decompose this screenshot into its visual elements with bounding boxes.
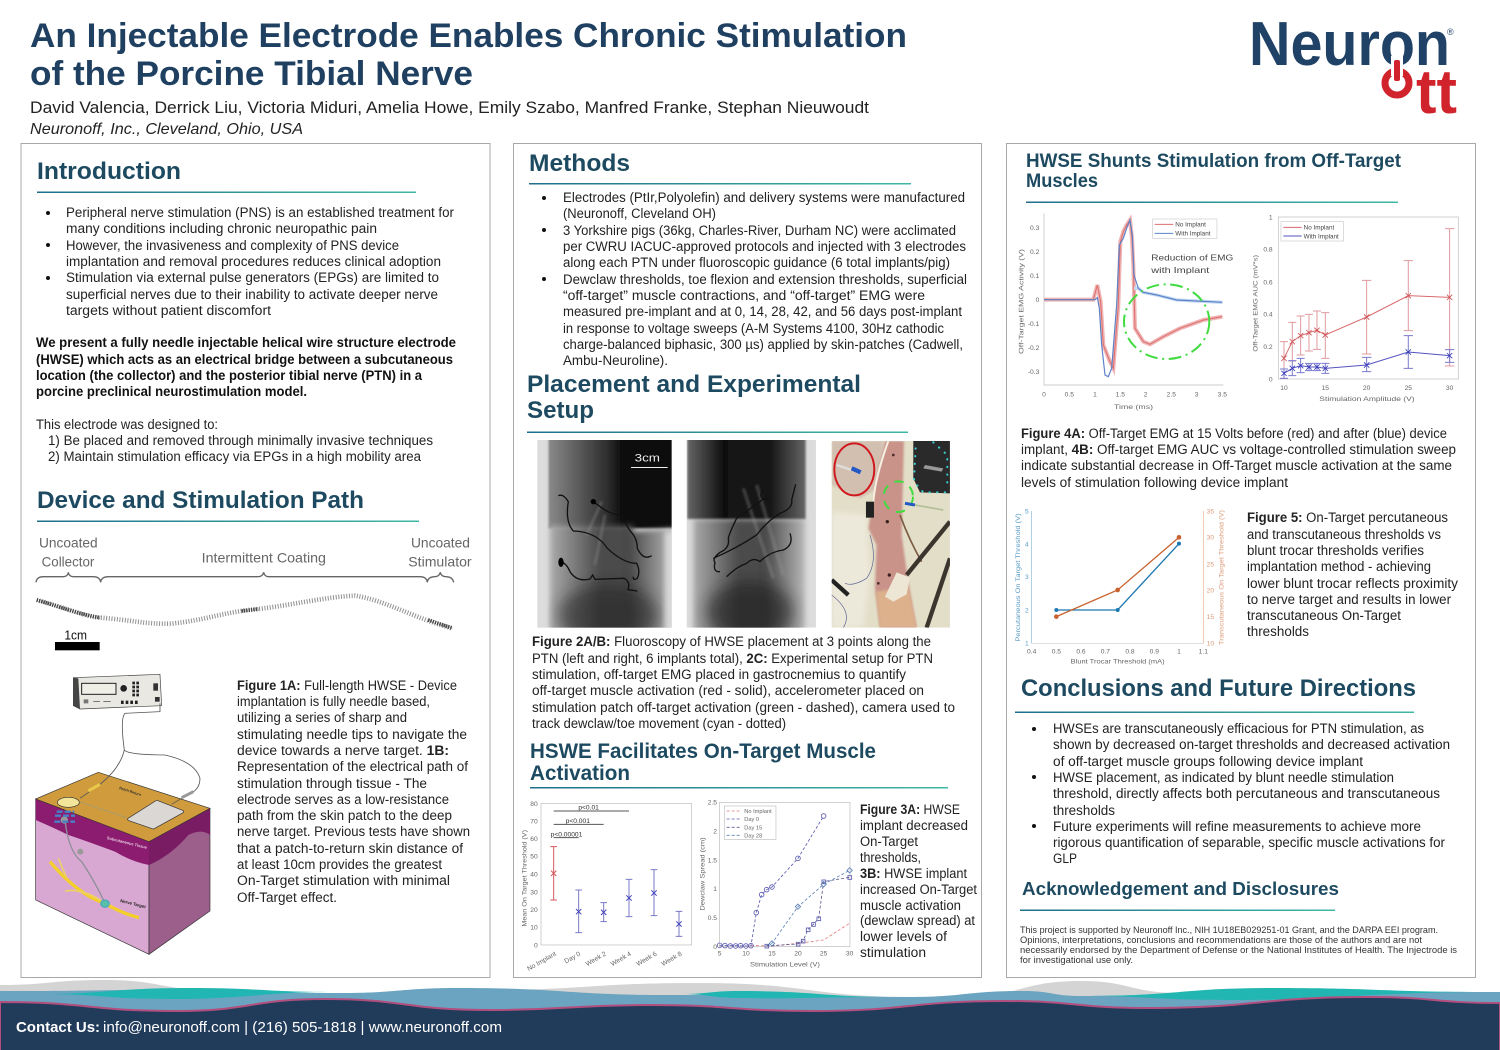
- chart 4A: off-target EMG traces: Off-Target EMG Activity (V): [1018, 249, 1025, 354]
- chart 4A: off-target EMG traces: 2.5: [1167, 392, 1176, 399]
- text: conclusions bullets: Future experiments will refine measurements to achieve more: [1053, 819, 1421, 834]
- text: conclusions bullets: shown by decreased on-target thresholds and decreased activation: [1053, 737, 1450, 752]
- chart 4A: off-target EMG traces: 0.2: [1030, 249, 1040, 256]
- chart 3A: mean on-target threshold: 10: [530, 925, 538, 932]
- title: An Injectable Electrode Enables Chronic Stimulation: [30, 17, 907, 55]
- figure 1A: electrode wire: Uncoated: [411, 535, 470, 551]
- logo: Neuronoff: [1249, 10, 1457, 127]
- chart 4A: off-target EMG traces: 1.5: [1116, 392, 1125, 399]
- chart 4B: off-target EMG AUC: Stimulation Amplitude (V): [1319, 396, 1415, 403]
- text: figure 1 caption: Figure 1A: Full-length HWSE - Device: [237, 678, 457, 693]
- chart 3A: mean on-target threshold: 60: [530, 836, 538, 843]
- logo: Neuronoff: tt: [1416, 58, 1457, 127]
- text: conclusions bullets: HWSE placement, as indicated by blunt needle stimulation: [1053, 770, 1394, 785]
- chart 3A: mean on-target threshold: p<0.01: [578, 805, 599, 812]
- chart 4A: off-target EMG traces: -0.2: [1028, 345, 1040, 352]
- chart 5: thresholds: Transcutaneous On Target Threshold (V): [1218, 510, 1225, 645]
- text: figure 1 caption: device towards a nerve target. 1B:: [237, 743, 449, 758]
- chart 5: thresholds: 1: [1177, 648, 1181, 655]
- chart 4A: off-target EMG traces: 3.5: [1218, 392, 1227, 399]
- electrode path: [54, 801, 127, 907]
- chart 3B: dewclaw spread: [699, 800, 854, 968]
- text: figure 2 caption: stimulation patch off-target activation (green - dashed), camera used to: [532, 700, 955, 715]
- chart 5: thresholds: 5: [1025, 508, 1029, 515]
- chart 3B: dewclaw spread: 20: [794, 950, 802, 957]
- chart 3A: mean on-target threshold: Week 8: [660, 951, 684, 968]
- chart 5: thresholds: 3: [1025, 574, 1029, 581]
- heading: HWSE Shunts Stimulation: [1026, 151, 1402, 203]
- text: conclusions bullets: [1032, 721, 1450, 866]
- chart 4A: off-target EMG traces: 0.3: [1030, 225, 1040, 232]
- text: figure 3 caption: stimulation: [860, 945, 926, 960]
- text: figure 2 caption: off-target muscle activation (red - solid), accelerometer placed on: [532, 683, 924, 698]
- text: introduction bullets: many conditions including chronic neuropathic pain: [66, 221, 377, 236]
- text: conclusions bullets: thresholds: [1053, 803, 1115, 818]
- chart 3B: dewclaw spread: 0: [713, 944, 717, 951]
- chart 4A: off-target EMG traces: 3: [1195, 392, 1199, 399]
- figure 1A: electrode wire: Uncoated: [39, 535, 98, 551]
- text: methods bullets: per CWRU IACUC-approved protocols and injected with 3 electrodes: [563, 239, 966, 254]
- chart 3B: dewclaw spread: 10: [742, 950, 750, 957]
- text: figure 1 caption: On-Target stimulation with minimal: [237, 873, 450, 888]
- text: design aims: 2) Maintain stimulation efficacy via EPGs in a high mobility area: [48, 449, 421, 464]
- chart 3B: dewclaw spread: Day 15: [744, 825, 762, 831]
- chart 4A: off-target EMG traces: With Implant: [1175, 231, 1211, 238]
- chart 3A: mean on-target threshold: 40: [530, 872, 538, 879]
- text: figure 2 caption: track dewclaw/toe movement (cyan - dotted): [532, 716, 786, 731]
- chart 4A: off-target EMG traces: 2: [1144, 392, 1148, 399]
- text: conclusions bullets: of off-target muscle groups following device implant: [1053, 754, 1363, 769]
- chart 5: thresholds: 0.6: [1076, 648, 1086, 655]
- chart 5: thresholds: 0.9: [1150, 648, 1159, 655]
- text: figure 5 caption: lower blunt trocar reflects proximity: [1247, 576, 1458, 591]
- chart 5: thresholds: 0.5: [1052, 648, 1061, 655]
- text: methods bullets: Electrodes (PtIr,Polyolefin) and delivery systems were manufactured: [563, 190, 965, 205]
- text: figure 3 caption: implant decreased: [860, 818, 968, 833]
- text: bold statement: (HWSE) which acts as an electrical bridge between a subcutaneous: [36, 352, 453, 367]
- text: disclosures: Opinions, interpretations, conclusions and recommendations are those of the authors and are not: [1020, 935, 1422, 946]
- text: methods bullets: “off-target” muscle contractions, and “off-target” EMG were: [563, 288, 925, 303]
- panel: middle: [514, 144, 982, 978]
- chart 3A: mean on-target threshold: p<0.001: [566, 818, 590, 825]
- chart 4A: off-target EMG traces: 0.5: [1065, 392, 1074, 399]
- text: figure 1 caption: [237, 678, 470, 905]
- text: disclosures: for investigational use only.: [1020, 955, 1133, 966]
- chart 4B: off-target EMG AUC: 10: [1280, 385, 1288, 392]
- heading: Placement and Experimental Setup: [527, 371, 908, 433]
- text: figure 1 caption: Representation of the electrical path of: [237, 759, 468, 774]
- text: introduction bullets: Peripheral nerve stimulation (PNS) is an established treatment for: [66, 205, 454, 220]
- text: bold statement: We present a fully needle injectable helical wire structure electrode: [36, 335, 456, 350]
- chart 3B: dewclaw spread: 0.5: [708, 915, 717, 922]
- heading: Placement and Experimental Setup: Placement and Experimental: [527, 371, 861, 398]
- text: methods bullets: (Neuronoff, Cleveland OH): [563, 206, 716, 221]
- chart 5: thresholds: 15: [1207, 614, 1214, 621]
- text: bold statement: [36, 335, 456, 399]
- text: methods bullets: Dewclaw thresholds, toe flexion and extension thresholds, superficial: [563, 272, 967, 287]
- figure 2B: fluoroscopy right: [686, 440, 816, 628]
- chart 4A: off-target EMG traces: No Implant: [1175, 221, 1206, 228]
- text: conclusions bullets: GLP: [1053, 851, 1077, 866]
- chart 4B: off-target EMG AUC: 1: [1269, 214, 1273, 221]
- text: introduction bullets: targets without patient discomfort: [66, 303, 271, 318]
- text: figure 1 caption: at least 10cm provides the greatest: [237, 857, 442, 872]
- box: tissue block: [36, 772, 210, 954]
- chart 3A: mean on-target threshold: No Implant: [526, 951, 558, 973]
- text: introduction bullets: superficial nerves due to their inability to activate deeper nerve: [66, 287, 438, 302]
- chart 3A: mean on-target threshold: 80: [530, 801, 538, 808]
- heading: HWSE Shunts Stimulation: HWSE Shunts Stimulation from Off-Target: [1026, 151, 1402, 172]
- logo: Neuronoff: Neuron: [1249, 10, 1450, 79]
- title: of the Porcine Tibial Nerve: [30, 55, 473, 93]
- text: methods bullets: along each PTN under fluoroscopic guidance (6 total implants/pig): [563, 255, 950, 270]
- panel: right: [1006, 144, 1476, 978]
- chart 3B: dewclaw spread: 25: [820, 950, 828, 957]
- text: figure 4 caption: indicate substantial decrease in Off-Target muscle activation at the same: [1021, 458, 1452, 473]
- heading: Placement and Experimental Setup: Setup: [527, 397, 594, 424]
- chart 5: thresholds: Blunt Trocar Threshold (mA): [1071, 659, 1165, 666]
- heading: Acknowledgement and Disclosures: Acknowledgement and Disclosures: [1022, 879, 1339, 899]
- text: methods bullets: [542, 190, 967, 368]
- text: design aims: 1) Be placed and removed through minimally invasive techniques: [48, 433, 433, 448]
- chart 4B: off-target EMG AUC: 20: [1363, 385, 1371, 392]
- figure 2A: fluoroscopy left: [537, 440, 672, 628]
- text: methods bullets: in response to voltage sweeps (A-M Systems 4100, 30Hz cathodic: [563, 321, 944, 336]
- footer: [0, 980, 1500, 1050]
- text: introduction bullets: [46, 205, 454, 318]
- chart 5: thresholds: 2: [1025, 607, 1029, 614]
- chart 4B: off-target EMG AUC: 30: [1446, 385, 1454, 392]
- text: figure 5 caption: and transcutaneous thresholds vs: [1247, 527, 1441, 542]
- chart 3A: mean on-target threshold: Mean On Target Threshold (V): [522, 830, 529, 927]
- chart 4A: off-target EMG traces: Time (ms): [1114, 404, 1153, 411]
- heading: Methods: Methods: [529, 150, 630, 177]
- chart 3A: mean on-target threshold: [522, 801, 692, 973]
- text: figure 1 caption: nerve target. Previous tests have shown: [237, 824, 470, 839]
- chart 4B: off-target EMG AUC: [1252, 214, 1458, 403]
- text: disclosures: This project is supported by Neuronoff Inc., NIH 1U18EB029251-01 Grant, and the DARPA EEI program.: [1020, 925, 1438, 936]
- chart 4B: off-target EMG AUC: 0.2: [1263, 344, 1273, 351]
- text: figure 1 caption: utilizing a series of sharp and: [237, 710, 407, 725]
- chart 5: thresholds: 0.7: [1101, 648, 1110, 655]
- chart 3A: mean on-target threshold: p<0.00001: [551, 831, 583, 838]
- heading: HSWE Facilitates On-Target Muscle Activation: [530, 740, 948, 788]
- text: introduction bullets: However, the invasiveness and complexity of PNS device: [66, 238, 399, 253]
- figure 1B: stimulation path diagram: [36, 674, 210, 954]
- text: figure 4 caption: [1021, 426, 1456, 490]
- text: figure 4 caption: implant, 4B: Off-target EMG AUC vs voltage-controlled stimulation sweep: [1021, 442, 1456, 457]
- chart 4B: off-target EMG AUC: 25: [1405, 385, 1412, 392]
- text: methods bullets: measured pre-implant and at 0, 14, 28, 42, and 56 days post-implant: [563, 304, 962, 319]
- text: figure 3 caption: (dewclaw spread) at: [860, 913, 975, 928]
- text: figure 3 caption: [860, 802, 977, 960]
- figure 1B: stimulation path diagram: Nerve Target: [120, 898, 147, 909]
- chart 4B: off-target EMG AUC: 15: [1322, 385, 1329, 392]
- heading: HWSE Shunts Stimulation: Muscles: [1026, 171, 1098, 192]
- figure 2C: experimental setup photo: [832, 441, 950, 628]
- chart 5: thresholds: [1015, 508, 1225, 666]
- text: figure 1 caption: stimulating needle tips to navigate the: [237, 727, 467, 742]
- text: disclosures: [1020, 925, 1457, 966]
- text: figure 1 caption: Off-Target effect.: [237, 890, 337, 905]
- text: figure 5 caption: transcutaneous On-Target: [1247, 608, 1401, 623]
- chart 5: thresholds: 0.8: [1125, 648, 1135, 655]
- chart 3B: dewclaw spread: 5: [718, 950, 722, 957]
- chart 3A: mean on-target threshold: 30: [530, 889, 538, 896]
- text: figure 5 caption: Figure 5: On-Target percutaneous: [1247, 510, 1448, 525]
- text: figure 1 caption: stimulation through tissue - The: [237, 776, 427, 791]
- text: figure 5 caption: implantation method - achieving: [1247, 559, 1431, 574]
- title: [30, 17, 907, 93]
- text: introduction bullets: Stimulation via external pulse generators (EPGs) are limited to: [66, 270, 439, 285]
- text: figure 2 caption: [532, 634, 955, 731]
- chart 3B: dewclaw spread: 2.5: [708, 800, 717, 807]
- figure 1B: stimulation path diagram: Subcutaneous Tissue: [106, 835, 148, 850]
- chart 5: thresholds: 1.1: [1199, 648, 1208, 655]
- text: figure 1 caption: implantation is fully needle based,: [237, 694, 430, 709]
- figure 1A: electrode wire: 1cm: [64, 628, 87, 642]
- heading: Device and Stimulation Path: Device and Stimulation Path: [37, 487, 364, 514]
- heading: Conclusions and Future Directions: Conclusions and Future Directions: [1021, 675, 1416, 702]
- chart 4A: off-target EMG traces: Reduction of EMG: [1151, 253, 1234, 263]
- chart 4B: off-target EMG AUC: 0.6: [1263, 279, 1273, 286]
- chart 3B: dewclaw spread: 30: [846, 950, 854, 957]
- figure 1B: stimulation path diagram: Patch Return: [119, 786, 142, 797]
- text: figure 3 caption: muscle activation: [860, 898, 961, 913]
- figure 1A: electrode wire: Intermittent Coating: [202, 550, 326, 566]
- text: figure 1 caption: that a patch-to-return skin distance of: [237, 841, 463, 856]
- text: conclusions bullets: threshold, directly affects both percutaneous and transcutaneous: [1053, 786, 1440, 801]
- panel: left: [21, 144, 490, 978]
- chart 4B: off-target EMG AUC: 0: [1269, 376, 1273, 383]
- chart 4A: off-target EMG traces: 0: [1036, 297, 1040, 304]
- text: figure 5 caption: [1247, 510, 1458, 639]
- text: design aims: [36, 417, 433, 464]
- chart 4B: off-target EMG AUC: No Implant: [1304, 225, 1334, 232]
- affiliation: Neuronoff, Inc., Cleveland, Ohio, USA: [30, 121, 303, 138]
- chart 3B: dewclaw spread: Day 28: [744, 833, 762, 839]
- chart 4A: off-target EMG traces: with Implant: [1150, 265, 1210, 275]
- heading: HSWE Facilitates On-Target Muscle Activation: HSWE Facilitates On-Target Muscle: [530, 740, 876, 763]
- chart 3A: mean on-target threshold: Day 0: [563, 951, 582, 965]
- text: figure 4 caption: Figure 4A: Off-Target EMG at 15 Volts before (red) and after (blue) device: [1021, 426, 1447, 441]
- heading: Introduction: Introduction: [37, 158, 181, 185]
- text: design aims: This electrode was designed to:: [36, 417, 218, 432]
- electrode patches and leads: [57, 703, 200, 828]
- chart 5: thresholds: 30: [1207, 535, 1214, 542]
- text: figure 2 caption: Figure 2A/B: Fluoroscopy of HWSE placement at 3 points along the: [532, 634, 931, 649]
- chart 3B: dewclaw spread: Dewclaw Spread (cm): [699, 837, 706, 911]
- chart 3A: mean on-target threshold: Week 4: [610, 951, 633, 968]
- chart 5: thresholds: 10: [1207, 641, 1214, 648]
- text: contact: info@neuronoff.com | (216) 505-1818 | www.neuronoff.com: [103, 1019, 502, 1036]
- chart 3B: dewclaw spread: 1: [713, 886, 717, 893]
- text: introduction bullets: implantation and removal procedures reduces clinical adoption: [66, 254, 441, 269]
- figure 1A: electrode wire: [36, 535, 472, 650]
- chart 3A: mean on-target threshold: 70: [530, 818, 538, 825]
- text: figure 3 caption: lower levels of: [860, 929, 947, 944]
- text: methods bullets: charge-balanced biphasic, 300 µs) applied by skin-patches (Cadwell,: [563, 337, 963, 352]
- text: figure 3 caption: thresholds,: [860, 850, 921, 865]
- chart 4A: off-target EMG traces: 1: [1093, 392, 1097, 399]
- chart 5: thresholds: 20: [1207, 588, 1214, 595]
- chart 3B: dewclaw spread: 15: [768, 950, 776, 957]
- chart 3B: dewclaw spread: Day 0: [744, 817, 759, 823]
- authors: David Valencia, Derrick Liu, Victoria Miduri, Amelia Howe, Emily Szabo, Manfred Franke, Stephan Nieuwoudt: [30, 98, 869, 117]
- chart 4B: off-target EMG AUC: 0.4: [1263, 312, 1273, 319]
- chart 3A: mean on-target threshold: Week 6: [635, 951, 659, 968]
- text: figure 2 caption: stimulation, off-target EMG placed in gastrocnemius to quantify: [532, 667, 906, 682]
- text: conclusions bullets: HWSEs are transcutaneously efficacious for PTN stimulation, as: [1053, 721, 1424, 736]
- text: figure 1 caption: electrode serves as a low-resistance: [237, 792, 449, 807]
- chart 3A: mean on-target threshold: 50: [530, 854, 538, 861]
- text: disclosures: necessarily endorsed by the Department of Defense or the National Institutes of Health. The Injectrode is: [1020, 945, 1457, 956]
- chart 4A: off-target EMG traces: -0.3: [1028, 369, 1040, 376]
- chart 3A: mean on-target threshold: 20: [530, 907, 538, 914]
- text: figure 3 caption: increased On-Target: [860, 882, 977, 897]
- figure 1A: electrode wire: Stimulator: [408, 554, 472, 570]
- chart 4B: off-target EMG AUC: With Implant: [1304, 233, 1339, 240]
- chart 5: thresholds: Percutaneous On Target Threshold (V): [1015, 513, 1022, 642]
- text: figure 3 caption: Figure 3A: HWSE: [860, 802, 960, 817]
- chart 4B: off-target EMG AUC: 0.8: [1263, 247, 1273, 254]
- chart 3B: dewclaw spread: Stimulation Level (V): [750, 961, 820, 968]
- chart 4A: off-target EMG traces: -0.1: [1028, 321, 1040, 328]
- chart 5: thresholds: 35: [1207, 508, 1214, 515]
- chart 5: thresholds: 4: [1025, 541, 1029, 548]
- chart 3B: dewclaw spread: No Implant: [744, 809, 772, 815]
- text: bold statement: porcine preclinical neurostimulation model.: [36, 384, 307, 399]
- text: figure 3 caption: 3B: HWSE implant: [860, 866, 967, 881]
- chart 5: thresholds: 1: [1025, 641, 1029, 648]
- text: contact: Contact Us:: [16, 1019, 100, 1036]
- heading: HSWE Facilitates On-Target Muscle Activation: Activation: [530, 762, 630, 785]
- text: figure 5 caption: blunt trocar thresholds verifies: [1247, 543, 1424, 558]
- chart 3B: dewclaw spread: 1.5: [708, 857, 717, 864]
- chart 5: thresholds: 25: [1207, 561, 1214, 568]
- logo: Neuronoff: ®: [1447, 27, 1454, 37]
- chart 4B: off-target EMG AUC: Off-Target EMG AUC (mV*s): [1252, 255, 1259, 352]
- text: bold statement: location (the collector) and the posterior tibial nerve (PTN) in a: [36, 368, 422, 383]
- text: methods bullets: 3 Yorkshire pigs (36kg, Charles-River, Durham NC) were acclimated: [563, 223, 956, 238]
- text: figure 5 caption: thresholds: [1247, 624, 1309, 639]
- text: figure 4 caption: levels of stimulation following device implant: [1021, 475, 1288, 490]
- chart 5: thresholds: 0.4: [1027, 648, 1037, 655]
- figure 1A: electrode wire: Collector: [42, 554, 95, 570]
- icon: pulse generator: [73, 674, 162, 709]
- chart 3B: dewclaw spread: 2: [713, 828, 717, 835]
- chart 3A: mean on-target threshold: Week 2: [585, 951, 608, 968]
- chart 4A: off-target EMG traces: 0: [1042, 392, 1046, 399]
- text: conclusions bullets: rigorous quantification of separable, specific muscle activations for: [1053, 835, 1445, 850]
- text: figure 2 caption: PTN (left and right, 6 implants total), 2C: Experimental setup for PTN: [532, 651, 933, 666]
- text: figure 1 caption: path from the skin patch to the deep: [237, 808, 452, 823]
- chart 4A: off-target EMG traces: [1018, 213, 1234, 411]
- figure 2A: fluoroscopy left: 3cm: [635, 453, 660, 465]
- chart 4A: off-target EMG traces: 0.1: [1030, 273, 1040, 280]
- text: figure 3 caption: On-Target: [860, 834, 918, 849]
- text: methods bullets: Ambu-Neuroline).: [563, 353, 668, 368]
- text: figure 5 caption: to nerve target and results in lower: [1247, 592, 1451, 607]
- chart 3A: mean on-target threshold: 0: [534, 942, 538, 949]
